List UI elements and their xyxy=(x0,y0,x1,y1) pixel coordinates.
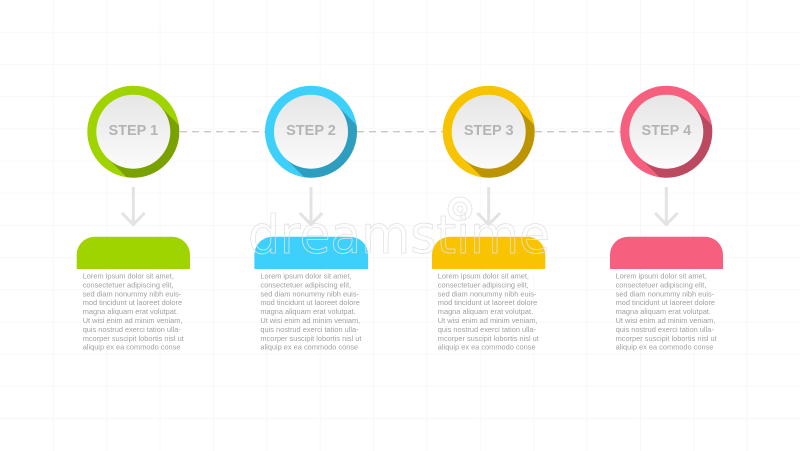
step 2 arrow xyxy=(300,187,322,224)
step 2 text: magna aliquam erat volutpat. xyxy=(260,307,356,316)
step 4 arrow xyxy=(655,187,678,224)
step 3 bar xyxy=(432,237,545,269)
step 3 text: sed diam nonummy nibh euis- xyxy=(438,289,537,298)
step 3 badge xyxy=(442,86,535,178)
step 3 text: mcorper suscipit lobortis nisl ut xyxy=(438,334,539,343)
step 2 text xyxy=(260,272,361,352)
step 2 badge xyxy=(265,86,357,178)
step 4 text: quis nostrud exerci tation ulla- xyxy=(616,325,714,334)
step 3 badge: STEP 3 xyxy=(464,123,514,139)
step 1 arrow xyxy=(122,187,145,224)
step 4 text: consectetuer adipiscing elit, xyxy=(616,280,706,289)
step 4 column xyxy=(610,86,726,352)
step 1 text: mcorper suscipit lobortis nisl ut xyxy=(83,334,184,343)
step 1 column xyxy=(77,86,193,352)
step 1 badge: STEP 1 xyxy=(108,123,158,139)
step 2 text: quis nostrud exerci tation ulla- xyxy=(260,325,359,334)
step 2 text: consectetuer adipiscing elit, xyxy=(260,280,351,289)
step 3 text: quis nostrud exerci tation ulla- xyxy=(438,325,537,334)
step 1 text: magna aliquam erat volutpat. xyxy=(83,307,178,316)
step 2 text: mod tincidunt ut laoreet dolore xyxy=(260,298,360,307)
step 3 column xyxy=(432,86,549,352)
step 2 text: aliquip ex ea commodo conse xyxy=(260,343,358,352)
step 4 text: Ut wisi enim ad minim veniam, xyxy=(616,316,715,325)
dashed connector lines xyxy=(180,131,620,133)
step 4 badge xyxy=(620,86,712,178)
step 3 text: aliquip ex ea commodo conse xyxy=(438,343,536,352)
step 3 text: Ut wisi enim ad minim veniam, xyxy=(438,316,538,325)
step 1 text: consectetuer adipiscing elit, xyxy=(83,280,173,289)
step 1 text: mod tincidunt ut laoreet dolore xyxy=(83,298,182,307)
step 3 text: mod tincidunt ut laoreet dolore xyxy=(438,298,537,307)
step 4 text: Lorem ipsum dolor sit amet, xyxy=(616,272,707,280)
watermark: dreamstime xyxy=(248,205,550,266)
step 4 text xyxy=(616,272,717,352)
step 4 text: mod tincidunt ut laoreet dolore xyxy=(616,298,715,307)
step 1 text: quis nostrud exerci tation ulla- xyxy=(83,325,181,334)
step 1 bar xyxy=(77,237,190,269)
step 3 arrow xyxy=(477,187,500,224)
step 1 badge xyxy=(87,86,180,178)
step 4 text: aliquip ex ea commodo conse xyxy=(616,343,713,352)
step 4 bar xyxy=(610,237,723,269)
step 2 text: mcorper suscipit lobortis nisl ut xyxy=(260,334,361,343)
step 2 text: Lorem ipsum dolor sit amet, xyxy=(260,272,352,280)
step 1 text xyxy=(83,272,184,352)
step 2 text: Ut wisi enim ad minim veniam, xyxy=(260,316,360,325)
step 4 text: magna aliquam erat volutpat. xyxy=(616,307,711,316)
step 1 text: aliquip ex ea commodo conse xyxy=(83,343,180,352)
step 1 text: Ut wisi enim ad minim veniam, xyxy=(83,316,183,325)
step 2 text: sed diam nonummy nibh euis- xyxy=(260,289,360,298)
infographic: four step process xyxy=(76,86,723,351)
step 4 text: sed diam nonummy nibh euis- xyxy=(616,289,715,298)
step 2 badge: STEP 2 xyxy=(286,123,336,139)
step 1 text: sed diam nonummy nibh euis- xyxy=(83,289,182,298)
step 2 bar xyxy=(254,237,368,269)
step 2 column xyxy=(254,86,371,352)
step 1 text: Lorem ipsum dolor sit amet, xyxy=(83,272,174,280)
step 3 text: Lorem ipsum dolor sit amet, xyxy=(438,272,529,280)
step 4 text: mcorper suscipit lobortis nisl ut xyxy=(616,334,717,343)
step 3 text xyxy=(438,272,539,352)
step 4 badge: STEP 4 xyxy=(641,123,691,139)
step 3 text: magna aliquam erat volutpat. xyxy=(438,307,533,316)
step 3 text: consectetuer adipiscing elit, xyxy=(438,280,529,289)
